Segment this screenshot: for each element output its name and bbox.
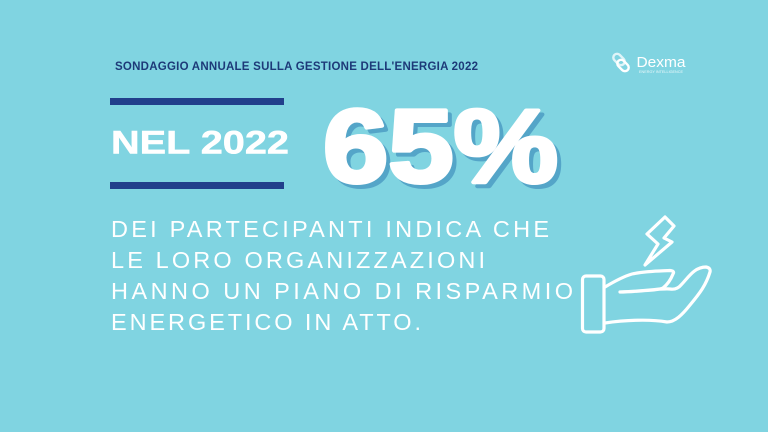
body text: DEI PARTECIPANTI INDICA CHE <box>111 216 549 242</box>
logo: Dexma: Dexma <box>636 55 686 71</box>
body text: ENERGETICO IN ATTO. <box>111 309 421 335</box>
body text: HANNO UN PIANO DI RISPARMIO <box>111 278 573 304</box>
label: NEL 2022: NEL 2022 <box>111 124 289 160</box>
big number: 65%: 65% <box>323 89 558 205</box>
logo: Dexma: ENERGY INTELLIGENCE <box>639 70 684 74</box>
icon: hand outline <box>605 267 710 323</box>
big number: 65%: 65% <box>327 93 562 209</box>
icon: lightning bolt <box>645 217 674 265</box>
top bar <box>110 98 284 105</box>
body text: LE LORO ORGANIZZAZIONI <box>111 247 485 273</box>
heading: survey title: SONDAGGIO ANNUALE SULLA GESTIONE DELL'ENERGIA 2022 <box>115 61 478 73</box>
bottom bar <box>110 182 284 189</box>
icon: cuff <box>582 276 604 332</box>
logo: Dexma <box>612 52 686 74</box>
icon: hand holding lightning bolt <box>582 217 710 332</box>
body text <box>111 216 573 335</box>
